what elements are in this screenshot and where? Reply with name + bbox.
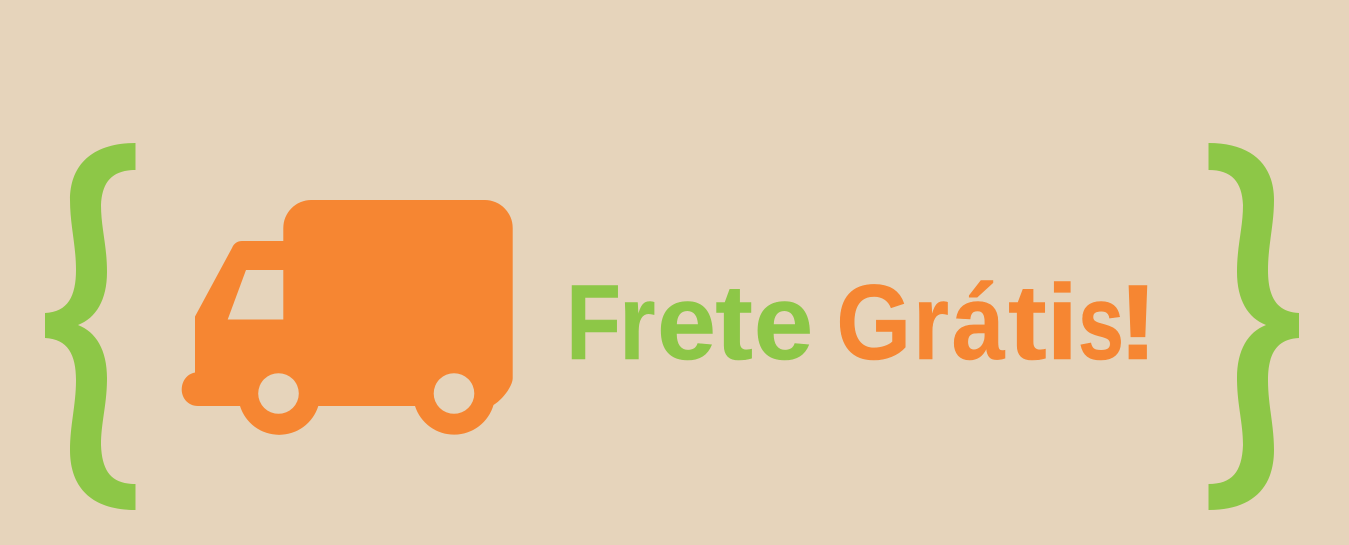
- left curly brace: [45, 143, 136, 510]
- headline: Frete Grátis!: r: [913, 262, 949, 382]
- headline: Frete Grátis!: G: [836, 262, 911, 382]
- headline: Frete Grátis!: á: [952, 262, 1005, 382]
- headline: Frete Grátis!: e: [657, 262, 716, 382]
- headline: Frete Grátis!: t: [1008, 262, 1047, 382]
- headline: Frete Grátis!: s: [1078, 262, 1124, 382]
- headline: Frete Grátis!: e: [754, 262, 813, 382]
- headline: Frete Grátis!: r: [619, 262, 656, 382]
- headline: Frete Grátis!: F: [566, 262, 621, 382]
- headline: Frete Grátis!: t: [715, 262, 753, 382]
- headline: Frete Grátis!: i: [1046, 262, 1078, 382]
- right curly brace: [1208, 143, 1299, 510]
- headline: Frete Grátis!: !: [1117, 262, 1159, 382]
- icon: orange delivery truck: [182, 200, 513, 435]
